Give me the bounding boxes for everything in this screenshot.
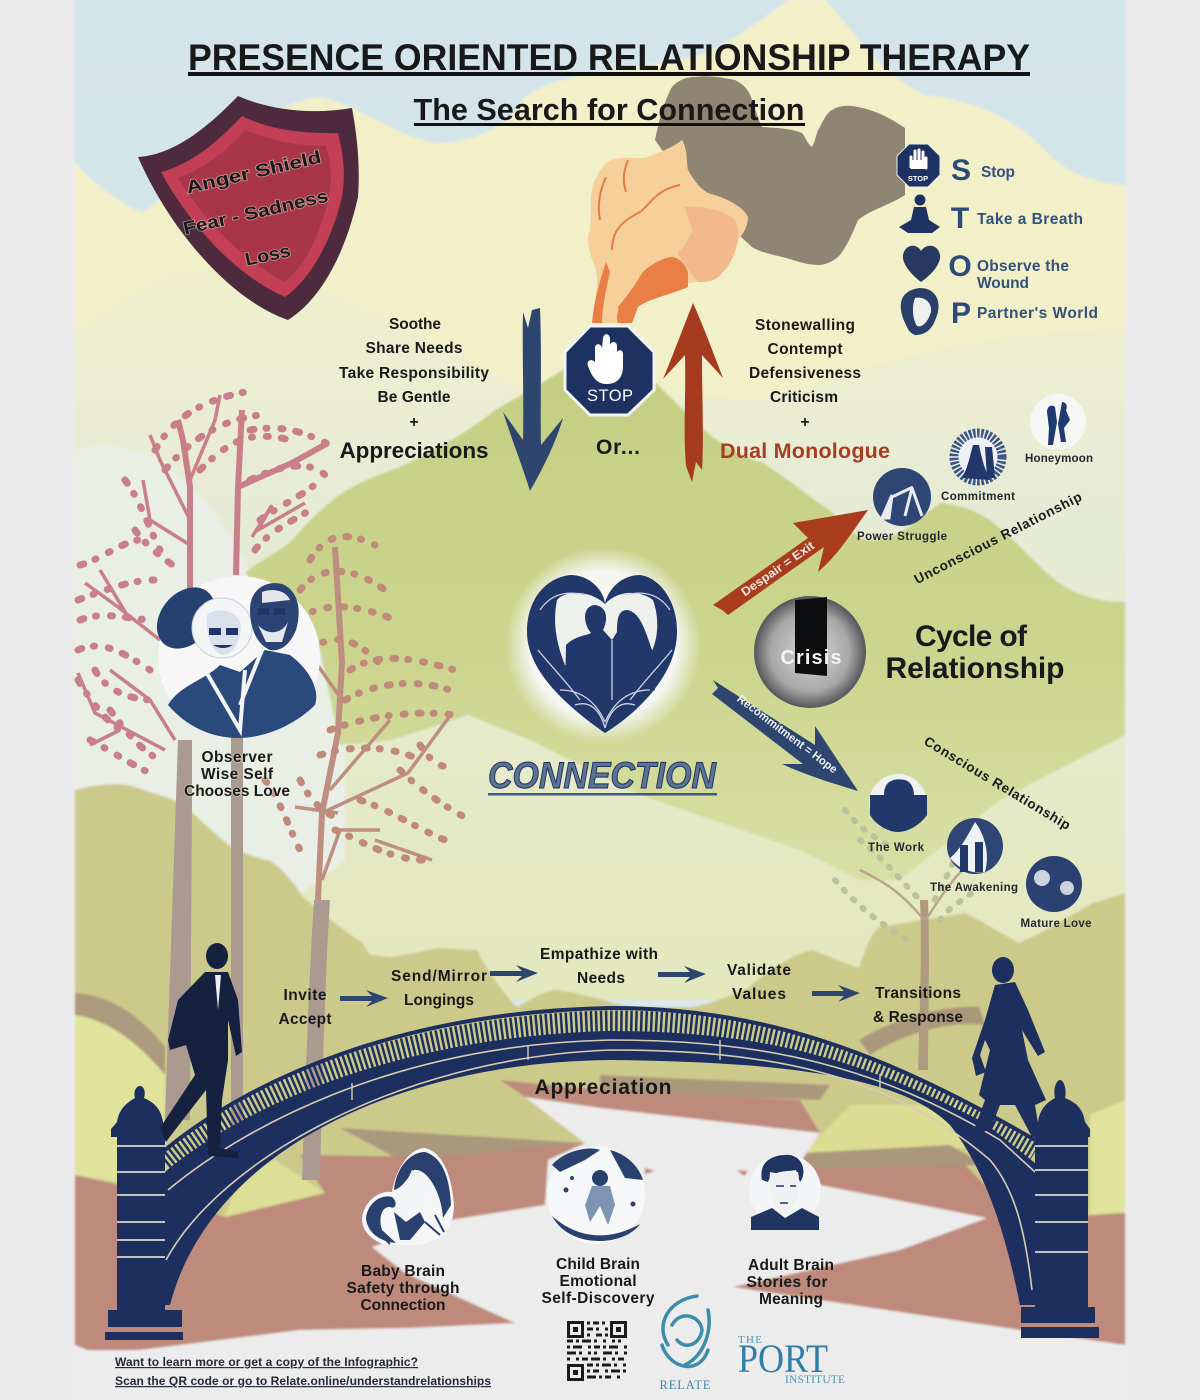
baby brain caption: Connection [360, 1297, 446, 1314]
unconscious relationship cycle [857, 394, 1093, 587]
connection heart [505, 547, 701, 743]
empathize needs: Needs [577, 970, 625, 987]
adult brain caption: Stories for [746, 1274, 828, 1291]
child brain caption: Emotional [560, 1273, 636, 1290]
child brain caption: Self-Discovery [542, 1290, 655, 1307]
crisis circle: Crisis [780, 647, 842, 669]
validate values [727, 962, 791, 1003]
plume pink patch [678, 207, 738, 282]
the awakening stage: The Awakening [930, 882, 1018, 894]
conscious relationship cycle [868, 733, 1092, 930]
shield text [181, 147, 330, 270]
grandfather face highlights [258, 590, 290, 642]
grandmother face [207, 610, 241, 655]
jackets [168, 650, 316, 738]
dialogue step labels and arrows [278, 946, 963, 1028]
transitions response: Transitions [875, 985, 961, 1002]
child brain caption [542, 1256, 655, 1307]
mother and baby icon [362, 1148, 454, 1245]
letter O and label [948, 250, 1069, 292]
arrow 4 [812, 985, 860, 1002]
plume veins [599, 160, 680, 250]
woman silhouette [972, 957, 1046, 1137]
despair arrow: Despair = Exit [738, 538, 817, 599]
Port Institute logo: INSTITUTE [785, 1374, 845, 1386]
arrow 2 [490, 965, 538, 982]
plume left streak [592, 262, 610, 323]
heart inner window [555, 593, 657, 690]
cycle of relationship heading: Relationship [886, 652, 1064, 685]
right column conflict list: Criticism [770, 389, 838, 406]
left column repair list: Share Needs [366, 340, 462, 357]
small tree on right [835, 810, 985, 1070]
right column conflict list: Defensiveness [749, 365, 861, 382]
heart filigree [538, 593, 672, 728]
adult brain caption: Meaning [759, 1291, 823, 1308]
honeymoon stage [1025, 394, 1093, 465]
adult brain caption [746, 1257, 834, 1308]
Port Institute logo: PORT [738, 1336, 828, 1381]
right pillar [1021, 1080, 1099, 1338]
stop sign [565, 326, 654, 415]
plume dark orange patch [617, 257, 688, 323]
despair arrow [713, 510, 868, 615]
empathize needs: Empathize with [540, 946, 658, 963]
unconscious label: Unconscious Relationship [912, 489, 1084, 587]
conscious label: Conscious Relationship [921, 733, 1073, 833]
letter T and label: Take a Breath [977, 211, 1083, 228]
letter P and label [951, 297, 1098, 330]
transitions response [873, 985, 963, 1026]
invite accept: Invite [284, 987, 327, 1004]
arrow 3 [658, 966, 706, 983]
letter O and label: Observe the [977, 258, 1069, 275]
arrow down navy [503, 308, 563, 491]
grandmother hair [192, 598, 252, 658]
validate values: Validate [727, 962, 791, 979]
send mirror longings [391, 968, 487, 1009]
footer call to action [115, 1355, 491, 1388]
shield rim [138, 96, 359, 320]
baby brain caption: Safety through [346, 1280, 460, 1297]
letter S and label [951, 154, 1015, 187]
commitment stage [941, 433, 1015, 503]
left column repair list: + [409, 414, 419, 431]
arrow 1 [340, 990, 388, 1007]
railing balusters [165, 1021, 1035, 1162]
arch block joints [352, 1040, 880, 1100]
Relate logo [660, 1296, 711, 1392]
cycle of relationship heading: Cycle of [915, 620, 1028, 653]
letter P and label: Partner's World [977, 305, 1098, 322]
the work stage [868, 774, 927, 854]
stop sign: STOP [587, 387, 633, 405]
footer call to action: Scan the QR code or go to Relate.online/understandrelationships [115, 1374, 491, 1388]
shield text: Fear - Sadness [181, 186, 330, 239]
pink trees [78, 392, 330, 1130]
right column conflict list: Dual Monologue [720, 439, 890, 463]
or text: Or... [596, 436, 640, 459]
letter T and label [951, 202, 1083, 235]
shield inner plate [178, 130, 331, 282]
volcano eruption smoke [588, 76, 905, 323]
invite accept [278, 987, 332, 1028]
left pillar [105, 1086, 183, 1340]
arrow up red [663, 303, 723, 482]
right column conflict list: Stonewalling [755, 317, 855, 334]
invite accept: Accept [278, 1011, 332, 1028]
heart outline [527, 575, 677, 733]
arch highlights [166, 1040, 1035, 1290]
grandfather head [250, 583, 299, 650]
recommitment arrow: Recommitment = Hope [734, 693, 839, 776]
power struggle stage [857, 468, 947, 543]
right column conflict list: Contempt [768, 341, 842, 358]
subtitle: The Search for Connection [414, 92, 804, 127]
letter S and label: S [951, 154, 971, 187]
letter P and label: P [951, 297, 971, 330]
Port Institute logo: THE [738, 1334, 762, 1346]
right column conflict list [720, 317, 890, 463]
observer caption: Wise Self [201, 766, 274, 783]
mature love stage: Mature Love [1020, 918, 1092, 930]
left column repair list [339, 316, 489, 463]
letter T and label: T [951, 202, 969, 235]
left column repair list: Take Responsibility [339, 365, 489, 382]
left column repair list: Be Gentle [378, 389, 451, 406]
transitions response: & Response [873, 1009, 963, 1026]
crisis circle [754, 596, 866, 708]
recommitment arrow [712, 680, 858, 791]
stop icon [897, 144, 940, 187]
broken heart icon [903, 246, 940, 282]
STOP legend [897, 144, 1098, 335]
letter O and label: Wound [977, 275, 1029, 292]
shield text: Loss [243, 241, 292, 270]
adult brain caption: Adult Brain [748, 1257, 834, 1274]
send mirror longings: Send/Mirror [391, 968, 487, 985]
thinking man icon [749, 1154, 821, 1230]
letter O and label: O [948, 250, 972, 283]
left column repair list: Soothe [389, 316, 441, 333]
validate values: Values [732, 986, 786, 1003]
baby brain [346, 1148, 460, 1314]
partner face icon [901, 288, 939, 335]
Relate logo: RELATE [660, 1378, 711, 1392]
orange tree [265, 537, 470, 1180]
rail top [165, 1008, 1035, 1150]
observer caption: Observer [202, 749, 272, 766]
right column conflict list: + [800, 414, 810, 431]
observer caption: Chooses Love [184, 783, 290, 800]
stop icon: STOP [908, 174, 928, 183]
appreciation label: Appreciation [534, 1076, 672, 1099]
baby brain caption: Baby Brain [361, 1263, 445, 1280]
empathize needs [540, 946, 658, 987]
connection label: CONNECTION [488, 755, 717, 796]
glasses and smile [209, 608, 285, 648]
man silhouette [160, 943, 242, 1158]
child brain [542, 1146, 655, 1307]
hand icon [588, 334, 623, 384]
adult brain [746, 1154, 834, 1308]
meditation icon [899, 194, 940, 233]
left column repair list: Appreciations [340, 438, 488, 463]
mature love stage [1020, 856, 1092, 930]
hat [145, 576, 227, 660]
letter S and label: Stop [981, 164, 1015, 181]
title: PRESENCE ORIENTED RELATIONSHIP THERAPY [188, 37, 1030, 78]
observer caption [184, 749, 290, 800]
bridge [105, 1008, 1099, 1340]
honeymoon stage: Honeymoon [1025, 453, 1093, 465]
cycle of relationship heading [886, 620, 1064, 685]
plume body [588, 140, 748, 323]
power struggle stage: Power Struggle [857, 531, 947, 543]
door [795, 597, 827, 676]
shield text: Anger Shield [184, 147, 323, 197]
commitment stage: Commitment [941, 491, 1015, 503]
child brain caption: Child Brain [556, 1256, 640, 1273]
grey smoke cloud [655, 76, 905, 265]
the work stage: The Work [868, 842, 925, 854]
collars [205, 650, 262, 730]
QR code [567, 1321, 627, 1381]
anger shield [138, 96, 359, 320]
shield face [161, 116, 344, 297]
arch span [165, 1031, 1035, 1305]
couple silhouette [565, 605, 655, 705]
observer couple portrait [145, 576, 320, 738]
the awakening stage [930, 818, 1018, 894]
send mirror longings: Longings [404, 992, 474, 1009]
baby brain caption [346, 1263, 460, 1314]
footer call to action: Want to learn more or get a copy of the Infographic? [115, 1355, 418, 1369]
child icon [547, 1146, 645, 1244]
